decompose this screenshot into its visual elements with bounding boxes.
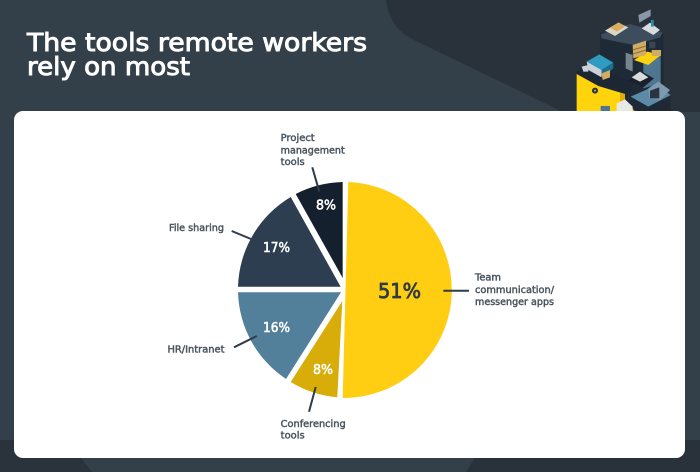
value: 16%: 16% bbox=[263, 321, 290, 336]
leader line and label: project management bbox=[281, 133, 345, 192]
title bbox=[26, 28, 367, 81]
leader line and label: team communication bbox=[443, 273, 555, 308]
leader line and label: file sharing: File sharing bbox=[169, 223, 224, 234]
value: 17%: 17% bbox=[263, 241, 290, 256]
leader line and label: HR/Intranet bbox=[168, 336, 257, 356]
white chart panel bbox=[14, 111, 685, 458]
title: rely on most bbox=[27, 52, 190, 81]
leader line and label: team communication: messenger apps bbox=[475, 297, 554, 308]
slice: HR/Intranet 16% bbox=[238, 292, 341, 379]
leader line and label: conferencing tools bbox=[281, 387, 346, 442]
illustration: isometric remote workplace bbox=[577, 9, 671, 112]
pie chart bbox=[238, 182, 452, 398]
leader line and label: team communication: Team bbox=[474, 273, 501, 284]
title: The tools remote workers bbox=[26, 28, 367, 57]
value: 8% conferencing: 8% bbox=[313, 363, 333, 378]
leader line and label: project management: tools bbox=[281, 157, 305, 168]
leader line and label: HR/Intranet: HR/Intranet bbox=[168, 345, 225, 356]
slice: conferencing 8% bbox=[291, 301, 342, 397]
slice: project management 8% bbox=[296, 182, 343, 278]
leader line and label: project management: management bbox=[281, 146, 345, 156]
slice: file sharing 17% bbox=[238, 197, 341, 287]
leader line and label: file sharing bbox=[169, 223, 251, 239]
leader line and label: project management: Project bbox=[281, 133, 315, 144]
leader line and label: conferencing tools: Conferencing bbox=[281, 419, 346, 430]
value: 8% project: 8% bbox=[316, 198, 336, 214]
leader line and label: team communication: communication/ bbox=[475, 285, 555, 296]
slice: team communication 51% bbox=[343, 182, 452, 398]
leader line and label: conferencing tools: tools bbox=[281, 430, 305, 442]
value: 51%: 51% bbox=[378, 279, 421, 303]
